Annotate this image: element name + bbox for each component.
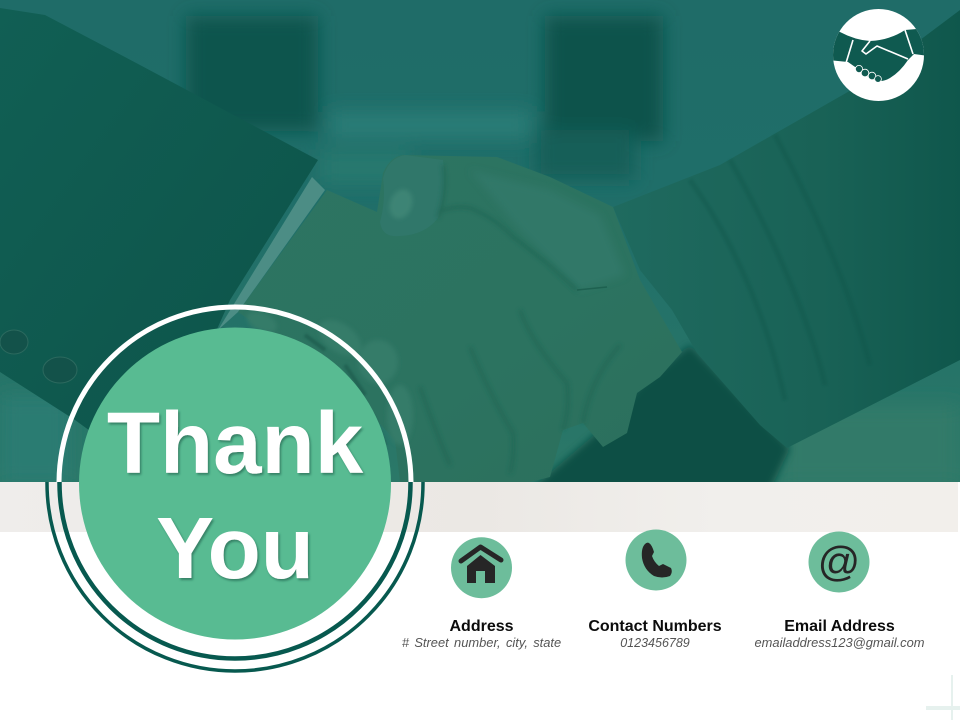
address heading: Address	[449, 618, 514, 635]
shaking hands	[238, 155, 682, 482]
icon: handshake badge	[828, 9, 928, 101]
address text: # Street number, city, state	[402, 635, 561, 650]
right sleeve	[613, 10, 960, 448]
thumb	[380, 155, 444, 236]
dark shadow under hands	[530, 345, 790, 490]
background photo: handshake	[0, 0, 960, 490]
contact: phone	[588, 530, 722, 650]
buttons	[0, 330, 77, 383]
title: Thank You: Thank	[107, 395, 364, 492]
icon: phone	[626, 530, 686, 590]
phone heading: Contact Numbers	[588, 618, 722, 635]
contact: address	[402, 537, 561, 650]
title: Thank You	[107, 395, 364, 597]
finger lines	[438, 168, 572, 384]
dark inner ring bottom	[57, 482, 413, 661]
dark outer ring bottom	[45, 482, 425, 673]
icon: house	[451, 537, 512, 598]
decorative faint cross	[926, 675, 960, 720]
icon: at sign: @	[818, 538, 860, 585]
contact: email	[754, 532, 925, 650]
white ring top	[56, 304, 414, 482]
green disc	[79, 328, 391, 640]
decorative circle: Thank You badge	[47, 295, 423, 671]
left sleeve	[0, 8, 318, 460]
email heading: Email Address	[784, 618, 895, 635]
cuff detail	[218, 177, 325, 330]
email text: emailaddress123@gmail.com	[754, 635, 925, 650]
palm crease	[577, 287, 607, 290]
icon: at sign	[808, 532, 870, 592]
title: Thank You: You	[156, 500, 314, 597]
phone number: 0123456789	[620, 636, 690, 650]
left-hand fingers	[244, 307, 413, 445]
beige strip	[0, 482, 958, 532]
upper hand highlight	[495, 185, 614, 280]
